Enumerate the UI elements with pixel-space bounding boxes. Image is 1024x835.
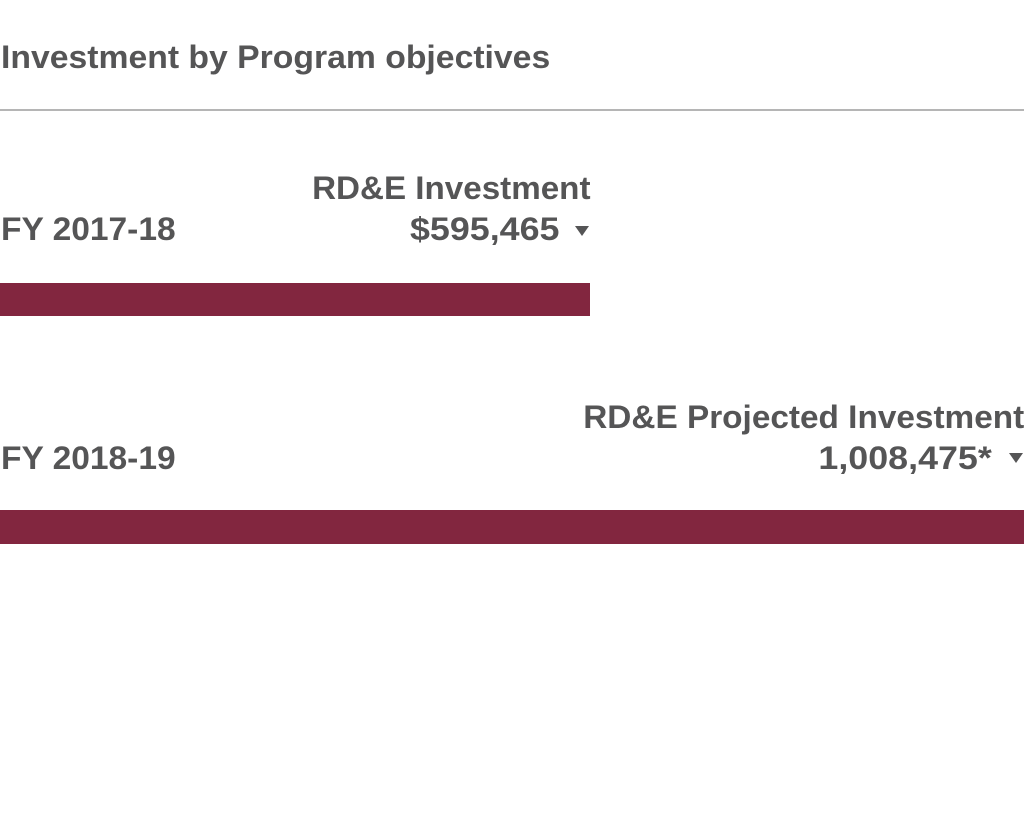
value: $595,465: $595,465: [410, 211, 559, 247]
bar: FY 2018-19: [0, 510, 1024, 544]
icon: triangle marker 2018-19: [1009, 453, 1023, 463]
label: RD&E Investment: RD&E Investment: [312, 170, 590, 206]
label: RD&E Projected Investment: RD&E Projected Investment: [583, 399, 1024, 435]
label: FY 2017-18: FY 2017-18: [1, 211, 176, 247]
title: Investment by Program objectives: [1, 39, 550, 75]
icon: triangle marker 2017-18: [575, 226, 589, 236]
label: FY 2018-19: FY 2018-19: [1, 440, 176, 476]
value: 1,008,475*: 1,008,475*: [819, 440, 992, 476]
bar: FY 2017-18: [0, 283, 590, 316]
